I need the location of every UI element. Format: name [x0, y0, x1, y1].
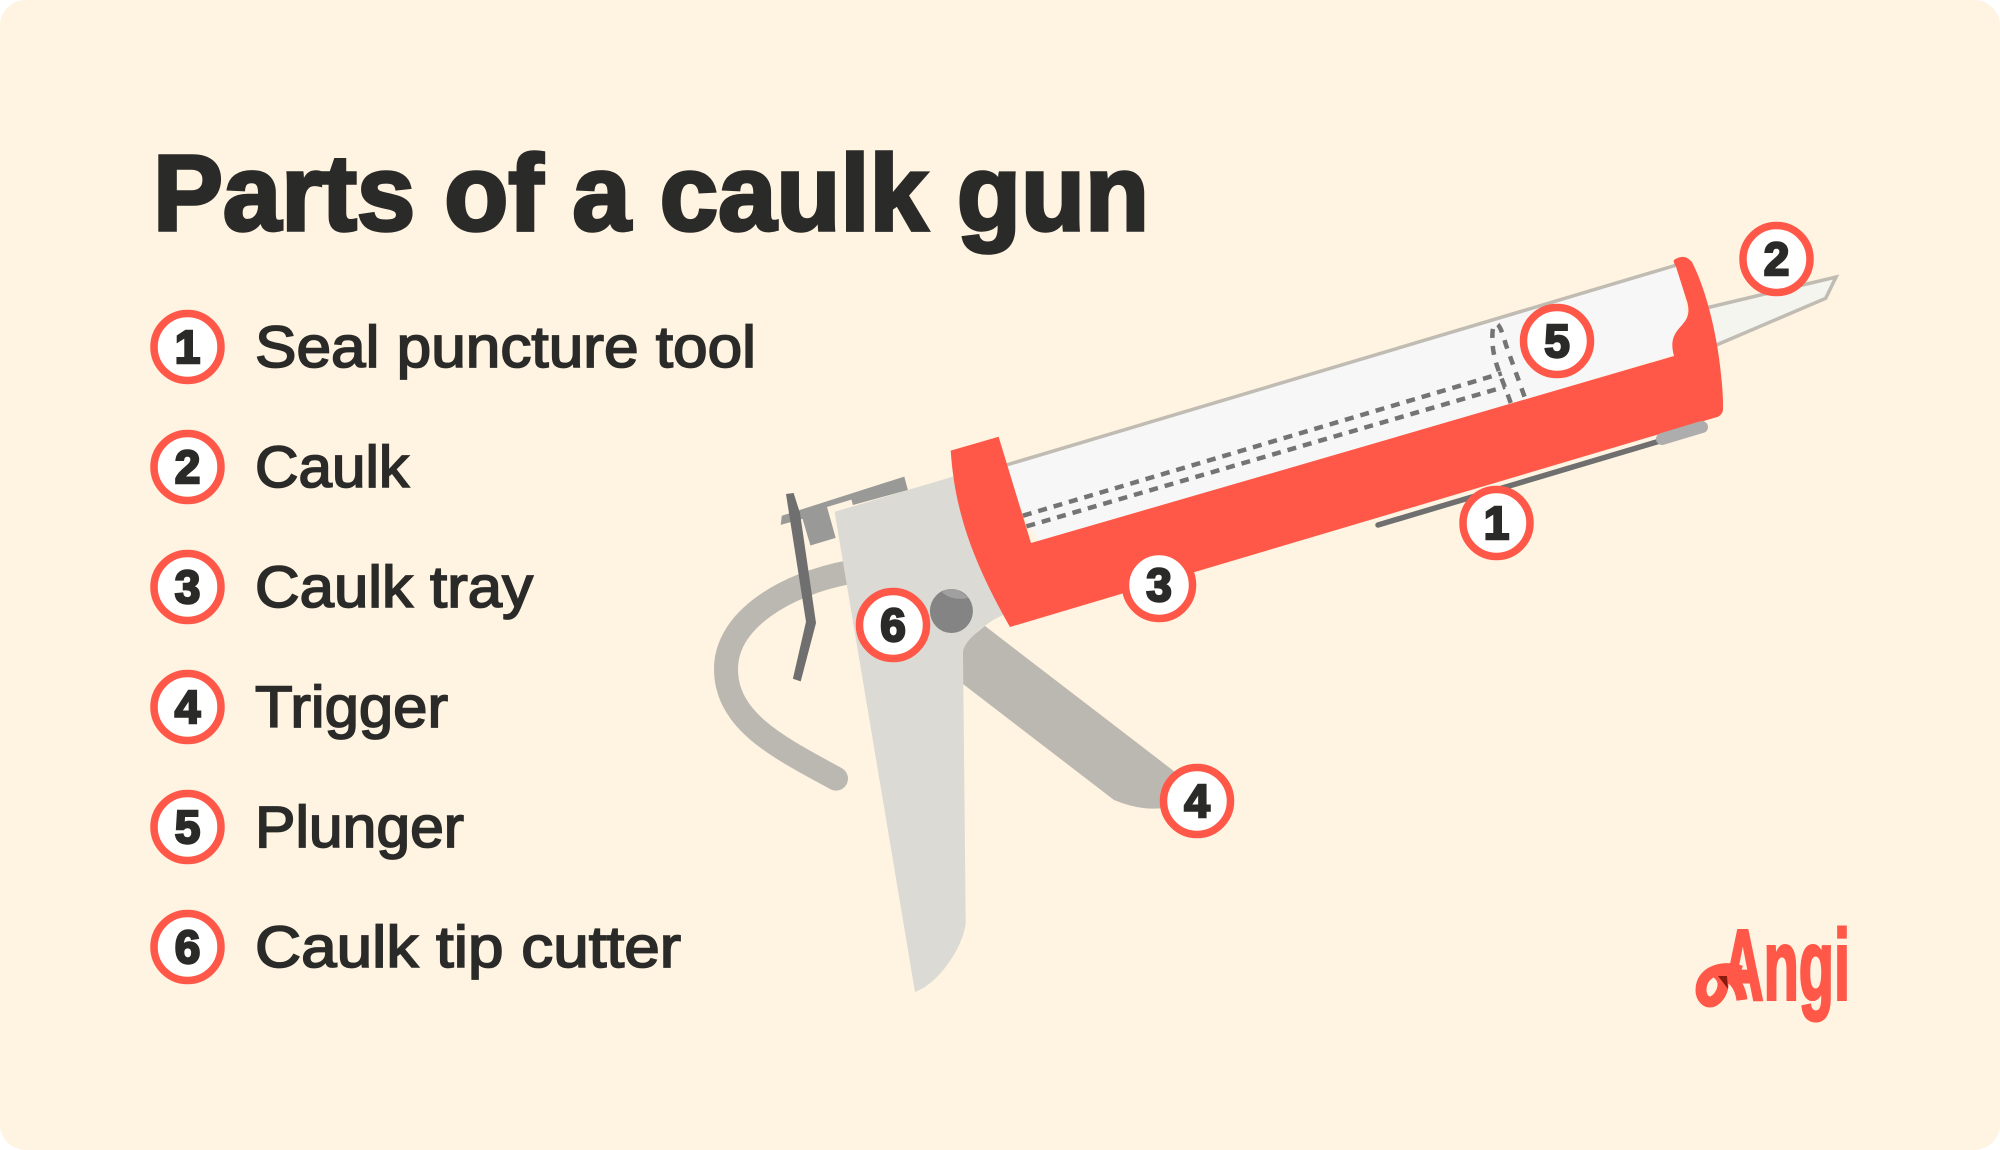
caulk gun illustration: [726, 226, 1836, 992]
hook rod: [726, 572, 850, 779]
callout 3: [1126, 552, 1192, 618]
legend item 2: caulk: [154, 434, 410, 500]
plunger dashes: [1492, 324, 1525, 403]
callout 6: 6: [880, 599, 906, 651]
caulk nozzle: [1706, 277, 1836, 346]
callout 4: 4: [1184, 775, 1210, 827]
callout 1: 1: [1484, 497, 1509, 549]
legend item 4: trigger: Trigger: [255, 675, 448, 740]
legend item 1: seal puncture tool: Seal puncture tool: [255, 315, 756, 380]
legend item 6: caulk tip cutter: 6: [175, 921, 200, 973]
callout 2: [1743, 226, 1810, 292]
Angi logo: Angi: [1722, 910, 1850, 1022]
trigger: [955, 626, 1189, 809]
tip cutter pivot: [930, 589, 973, 633]
caulk tube: [1000, 263, 1690, 545]
callout 1: [1463, 490, 1530, 556]
tube top edge: [1003, 264, 1680, 466]
legend item 4: trigger: [154, 674, 448, 740]
legend item 3: caulk tray: Caulk tray: [255, 555, 533, 620]
legend list: [154, 314, 756, 980]
legend item 1: seal puncture tool: 1: [175, 321, 200, 373]
callout 5: 5: [1544, 315, 1570, 367]
title: Parts of a caulk gun: [153, 132, 1149, 253]
handle: [835, 477, 1010, 992]
cutter plate: [781, 477, 908, 546]
legend item 3: caulk tray: [154, 554, 533, 620]
plunger rod dashes: [1023, 373, 1505, 526]
legend item 4: trigger: 4: [175, 681, 201, 733]
legend item 5: plunger: 5: [175, 801, 200, 853]
legend item 2: caulk: 2: [175, 441, 200, 493]
legend item 2: caulk: Caulk: [255, 435, 410, 500]
legend item 6: caulk tip cutter: Caulk tip cutter: [255, 915, 681, 980]
seal puncture tool: [1378, 427, 1702, 525]
callout 2: 2: [1764, 233, 1789, 285]
callout 3: 3: [1146, 559, 1172, 611]
caulk tray: [951, 257, 1723, 627]
legend item 5: plunger: Plunger: [255, 795, 464, 860]
callout 6: [860, 592, 926, 658]
release lever: [786, 493, 816, 681]
callout 5: [1524, 308, 1590, 374]
callout 4: [1164, 768, 1230, 834]
legend item 3: caulk tray: 3: [175, 561, 200, 613]
Angi logo: [1701, 910, 1850, 1022]
legend item 5: plunger: [154, 794, 464, 860]
